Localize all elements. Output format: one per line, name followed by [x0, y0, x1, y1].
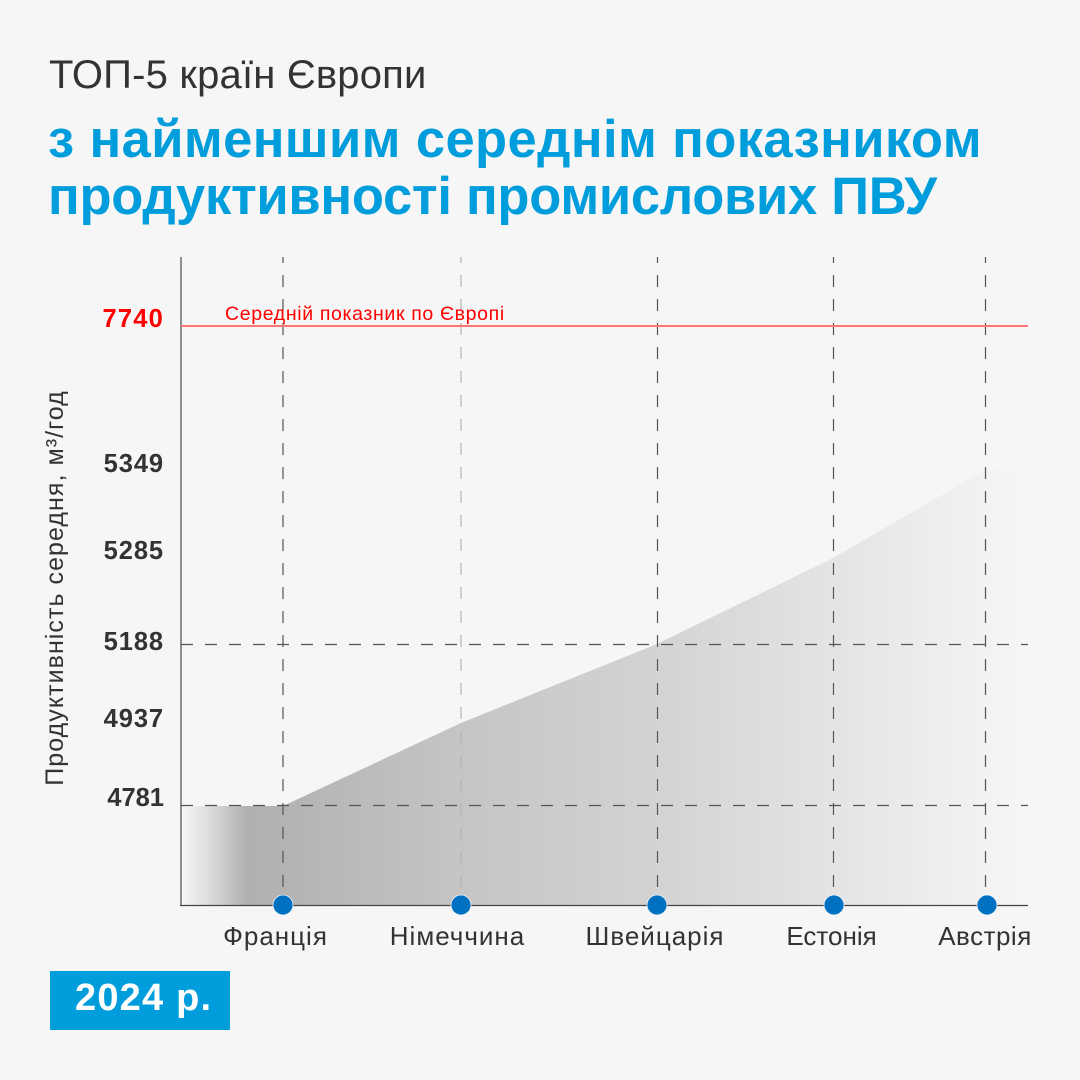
y axis values: 5285	[104, 537, 164, 565]
average line label: Середній показник по Європі	[225, 303, 505, 325]
x axis country labels: Естонія	[786, 921, 877, 951]
x axis country labels: Швейцарія	[586, 921, 724, 951]
vertical dashed guides	[283, 257, 986, 905]
y axis values: 4937	[104, 705, 164, 733]
x axis country labels: Австрія	[938, 921, 1032, 951]
y axis values: 5188	[104, 628, 164, 656]
year badge: 2024 р.	[75, 977, 212, 1019]
gradient area	[182, 470, 1028, 905]
country markers	[273, 895, 997, 915]
y axis values: 5349	[104, 450, 164, 478]
y axis values	[102, 305, 164, 812]
year badge	[50, 971, 230, 1030]
title: main heading	[48, 110, 982, 226]
average reference line	[181, 325, 1028, 327]
horizontal dashed guides	[181, 644, 1028, 806]
title: subtitle line: ТОП-5 країн Європи	[49, 53, 427, 97]
x axis country labels: Німеччина	[390, 921, 525, 951]
y axis values: 7740	[102, 305, 164, 333]
y axis title: Продуктивність середня, м³/год	[41, 390, 69, 786]
y axis values: 4781	[107, 784, 164, 812]
x axis country labels	[223, 921, 1032, 951]
title: main heading: з найменшим середнім показником	[48, 110, 982, 169]
title: main heading: продуктивності промислових ПВУ	[48, 166, 937, 226]
x axis country labels: Франція	[223, 921, 328, 951]
axes	[180, 257, 182, 906]
